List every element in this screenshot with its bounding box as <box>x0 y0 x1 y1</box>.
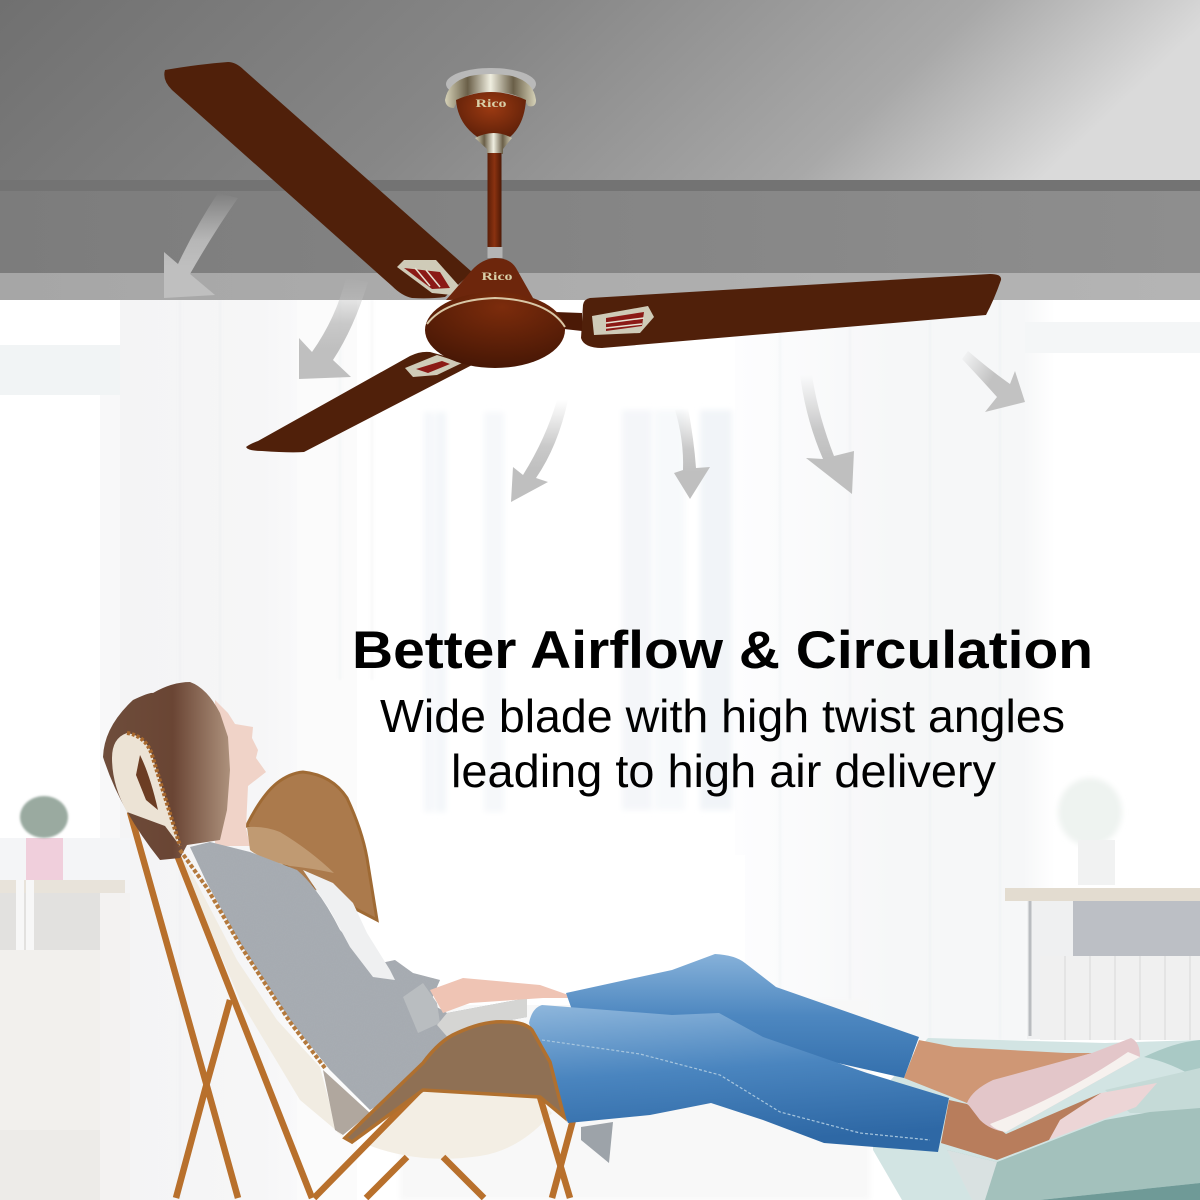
fan blade: right <box>581 274 1001 348</box>
sock sole <box>990 1052 1140 1132</box>
blade badge: lower left <box>405 355 462 377</box>
sweater <box>190 842 527 1110</box>
sweater cuff <box>403 983 440 1033</box>
fan blade: lower left <box>246 352 474 452</box>
chair seat stitching <box>180 850 325 1068</box>
arrow: airflow centre <box>674 408 710 499</box>
chair seat: front canvas <box>368 1090 552 1159</box>
fan motor housing <box>425 258 565 368</box>
jeans seam <box>542 1040 930 1140</box>
bed and pillows <box>873 1038 1200 1200</box>
logo on canopy: Rico <box>476 96 506 110</box>
subtitle line 2: leading to high air delivery <box>451 745 996 797</box>
chair back: leather panel <box>247 772 377 920</box>
sweater hem <box>437 998 527 1040</box>
face <box>215 700 266 846</box>
left radiator and shelf <box>0 838 130 1200</box>
arrow: airflow centre right <box>800 375 854 494</box>
arrow: airflow centre left <box>511 400 568 502</box>
headrest spots <box>136 755 158 810</box>
shirt <box>303 870 395 980</box>
logo on motor: Rico <box>482 269 512 283</box>
sock: lower foot <box>1049 1083 1157 1140</box>
chair frame legs <box>130 812 573 1198</box>
fan canopy <box>445 68 536 154</box>
right shelf and radiator <box>1005 778 1200 1040</box>
headrest: cowhide <box>112 733 180 846</box>
ceiling fan <box>164 62 1001 452</box>
ceiling <box>0 0 1200 300</box>
hand <box>430 978 577 1013</box>
curtain folds <box>180 300 1000 1200</box>
leg: upper foot <box>904 1040 1092 1103</box>
blade badge: upper left <box>397 260 460 295</box>
arrow: airflow far left <box>164 193 238 298</box>
lower seat cowhide <box>323 1070 370 1135</box>
chair front: leather panel <box>345 1022 564 1142</box>
headrest stitching <box>127 733 180 846</box>
arrow: airflow far right <box>962 351 1025 412</box>
blade badge: right <box>592 306 654 335</box>
sweater tail <box>581 1122 613 1163</box>
person in chair <box>103 682 1157 1198</box>
jeans: front leg <box>529 1005 949 1152</box>
fan downrod <box>488 153 502 258</box>
room background <box>0 300 1200 1200</box>
window plant pot <box>20 796 68 880</box>
leg: lower foot <box>941 1093 1105 1160</box>
hair <box>103 682 230 860</box>
hair: ponytail <box>247 827 334 873</box>
fan blade arm <box>555 312 582 331</box>
heading: Better Airflow & Circulation <box>352 621 1093 680</box>
jeans: rear leg <box>566 954 919 1078</box>
chair seat: white canvas <box>170 837 350 1142</box>
arrow: airflow left <box>299 278 368 379</box>
sock: upper foot <box>967 1038 1140 1132</box>
fan blade: upper left <box>164 62 472 298</box>
subtitle line 1: Wide blade with high twist angles <box>380 690 1065 742</box>
